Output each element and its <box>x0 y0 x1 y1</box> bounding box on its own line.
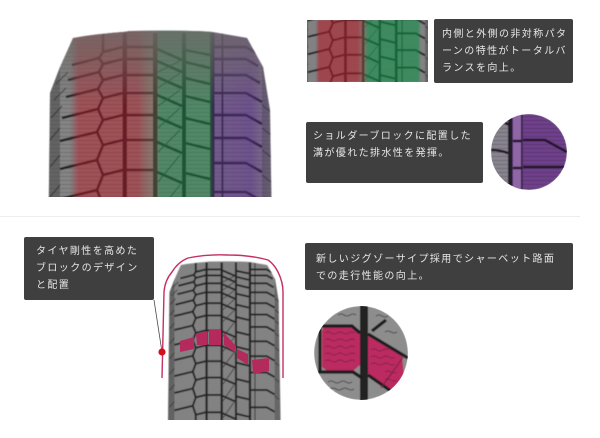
callout: asymmetric pattern: ランスを向上。 <box>442 61 522 74</box>
callout: block rigidity: ブロックのデザイン <box>36 261 139 274</box>
callout: zigzag sipes: での走行性能の向上。 <box>316 269 430 282</box>
circle detail: zigzag sipes <box>314 305 408 401</box>
callout: shoulder block: 溝が優れた排水性を発揮。 <box>313 146 450 159</box>
callout: asymmetric pattern <box>434 19 573 83</box>
callout: block rigidity: タイヤ剛性を高めた <box>36 244 138 257</box>
callout: shoulder block: ショルダーブロックに配置した <box>313 129 472 142</box>
highlighted blocks <box>180 330 269 374</box>
callout: asymmetric pattern: ーンの特性がトータルバ <box>442 44 567 57</box>
callout: block rigidity: と配置 <box>36 279 70 291</box>
callout: block rigidity <box>24 237 154 300</box>
callout: shoulder block <box>306 122 483 183</box>
circle detail: shoulder groove in purple <box>491 114 567 190</box>
crop: inner and outer pattern <box>307 20 428 82</box>
divider <box>0 216 580 217</box>
marker dot <box>158 348 166 356</box>
tyre contour line <box>162 255 283 378</box>
callout: zigzag sipes <box>305 243 573 290</box>
callout: asymmetric pattern: 内側と外側の非対称パタ <box>442 27 567 40</box>
leader line <box>154 300 162 352</box>
tyre tread with coloured zones <box>48 30 272 197</box>
callout: zigzag sipes: 新しいジグゾーサイプ採用でシャーベット路面 <box>316 252 555 265</box>
tyre front view with highlighted blocks <box>165 259 284 427</box>
